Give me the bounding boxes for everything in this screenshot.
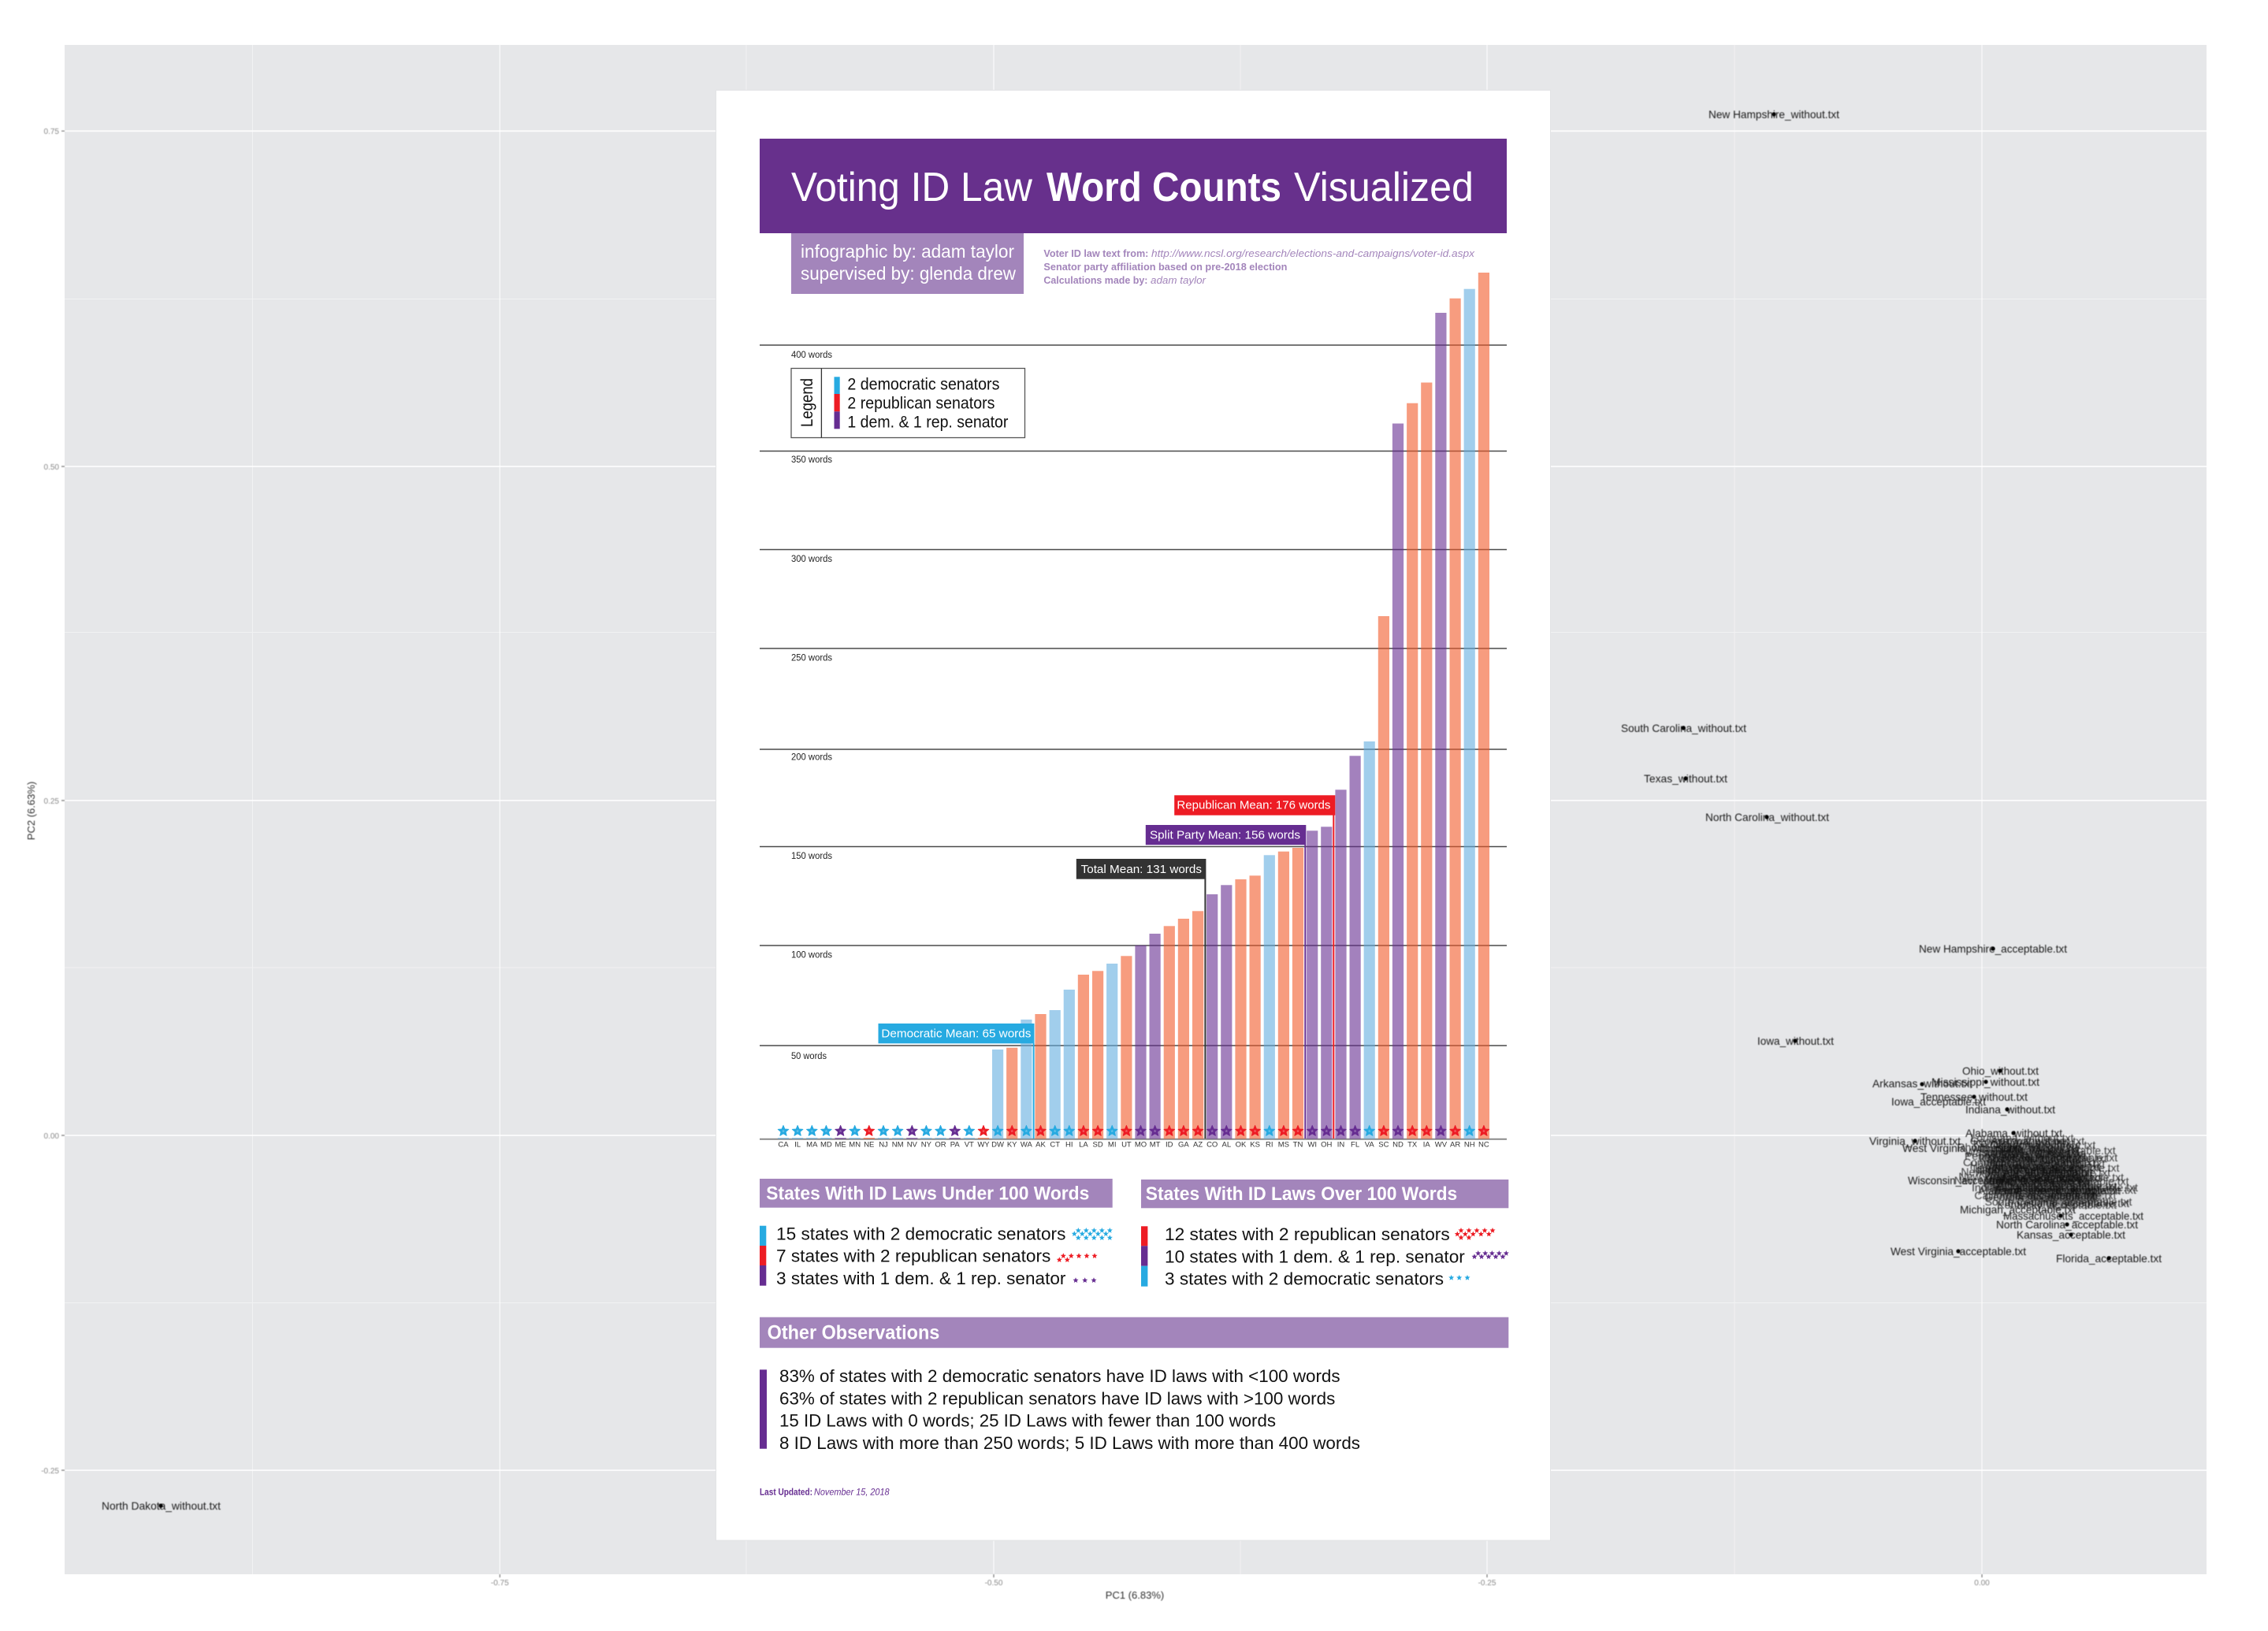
axis ticks and tick labels: 0.00 <box>44 1132 59 1141</box>
title banner: Visualized <box>1294 165 1474 210</box>
scatter labels: dense cluster: Louisiana_without.txt <box>1971 1131 2073 1144</box>
panel: other observations <box>760 1317 1508 1453</box>
gridline value labels <box>791 351 832 1061</box>
heading: over 100 words: States With ID Laws Over 100 Words <box>1146 1183 1457 1205</box>
sources note: Voter ID law text from: <box>1043 247 1148 259</box>
scatter labels: outliers: West Virginia_without.txt <box>1902 1142 2021 1154</box>
state abbreviations axis: AZ <box>1193 1141 1203 1150</box>
scatter labels: dense cluster: Vermont_acceptable.txt <box>1985 1161 2100 1173</box>
state abbreviations axis: ID <box>1166 1141 1173 1150</box>
state abbreviations axis: ND <box>1392 1141 1404 1150</box>
list text: 12 states with 2 republican senators <box>1165 1224 1450 1244</box>
heading: over 100 words <box>1141 1180 1508 1208</box>
scatter labels: outliers: North Dakota_without.txt <box>102 1499 221 1512</box>
axis ticks and tick labels: -0.75 <box>491 1579 509 1588</box>
legend: 2 republican senators <box>847 394 995 413</box>
gridline value labels: 50 words <box>791 1052 827 1061</box>
mean marker: democratic: Democratic Mean: 65 words <box>881 1027 1031 1041</box>
scatter labels: dense cluster: Oklahoma_without.txt <box>1990 1139 2095 1151</box>
party stars under bars <box>778 1125 1489 1135</box>
axis ticks and tick labels: 0.25 <box>44 797 59 806</box>
star pictogram: 3 democratic <box>1448 1275 1470 1280</box>
scatter labels: dense cluster: Kentucky_acceptable.txt <box>1997 1198 2117 1211</box>
list text: 15 states with 2 democratic senators <box>776 1224 1065 1243</box>
scatter labels: dense cluster: Illinois_acceptable.txt <box>1976 1164 2082 1176</box>
scatter labels: dense cluster: Georgia_acceptable.txt <box>1984 1191 2098 1203</box>
state abbreviations axis: PA <box>950 1141 960 1150</box>
scatter labels: outliers: Wisconsin_acceptable.txt <box>1908 1174 2026 1187</box>
state abbreviations axis: VA <box>1365 1141 1374 1150</box>
state abbreviations axis: TN <box>1293 1141 1303 1150</box>
title banner <box>760 139 1507 233</box>
scatter labels: outliers: Ohio_without.txt <box>1962 1064 2039 1077</box>
observation lines: 8 ID Laws with more than 250 words; 5 ID Laws with more than 400 words <box>779 1433 1360 1453</box>
panel: states over 100 words <box>1141 1180 1509 1289</box>
observation lines <box>779 1366 1360 1453</box>
state abbreviations axis: WI <box>1307 1141 1317 1150</box>
axis ticks and tick labels <box>41 128 1990 1588</box>
scatter labels: outliers: Kansas_acceptable.txt <box>2017 1228 2125 1241</box>
state abbreviations axis: AK <box>1035 1141 1046 1150</box>
state abbreviations axis: NC <box>1478 1141 1489 1150</box>
scatter labels: outliers: Virginia_without.txt <box>1869 1135 1961 1147</box>
state abbreviations axis: NM <box>892 1141 904 1150</box>
scatter labels: dense cluster: Washington_without.txt <box>1965 1146 2079 1158</box>
credits box: supervised by: glenda drew <box>801 263 1016 284</box>
state abbreviations axis: GA <box>1178 1141 1189 1150</box>
state abbreviations axis: MI <box>1108 1141 1116 1150</box>
axis ticks and tick labels: -0.25 <box>1478 1579 1497 1588</box>
state abbreviations axis: WV <box>1435 1141 1448 1150</box>
white poster panel <box>716 90 1551 1540</box>
state abbreviations axis: OH <box>1321 1141 1333 1150</box>
scatter labels: outliers: Iowa_acceptable.txt <box>1891 1095 1986 1108</box>
scatter labels: dense cluster: Arizona_without.txt <box>1991 1135 2084 1147</box>
heading: other observations <box>760 1317 1508 1348</box>
legend: 2 democratic senators <box>847 375 999 394</box>
state abbreviations axis: VT <box>965 1141 974 1150</box>
list text <box>776 1224 1065 1288</box>
state abbreviations axis: AR <box>1450 1141 1460 1150</box>
sources note <box>1043 247 1475 286</box>
state abbreviations axis: MO <box>1135 1141 1147 1150</box>
scatter labels: dense cluster: Idaho_acceptable.txt <box>1972 1163 2075 1176</box>
state abbreviations axis: NE <box>864 1141 874 1150</box>
scatter labels: outliers: South Carolina_without.txt <box>1621 722 1746 734</box>
state abbreviations axis: WY <box>977 1141 990 1150</box>
list text: 3 states with 1 dem. & 1 rep. senator <box>776 1269 1065 1288</box>
scatter labels: dense cluster: Missouri_acceptable.txt <box>2002 1151 2117 1164</box>
sources note: http://www.ncsl.org/research/elections-and-campaigns/voter-id.aspx <box>1151 247 1475 259</box>
gridline value labels: 200 words <box>791 753 832 763</box>
state abbreviations axis: AL <box>1221 1141 1231 1150</box>
scatter labels: dense cluster: Connecticut_acceptable.txt <box>1963 1156 2095 1168</box>
state abbreviations axis: MA <box>806 1141 818 1150</box>
heading: under 100 words: States With ID Laws Under 100 Words <box>766 1183 1089 1204</box>
state abbreviations axis: ME <box>835 1141 846 1150</box>
scatter labels: dense cluster: Utah_acceptable.txt <box>1984 1172 2082 1185</box>
state abbreviations axis: FL <box>1351 1141 1359 1150</box>
scatter labels: dense cluster: Alaska_acceptable.txt <box>2003 1166 2110 1179</box>
list text <box>1165 1224 1465 1289</box>
scatter cluster core <box>1978 1144 2106 1206</box>
scatter labels: dense cluster: New York_acceptable.txt <box>1958 1170 2080 1183</box>
observation lines: 83% of states with 2 democratic senators have ID laws with <100 words <box>779 1366 1340 1386</box>
gridline value labels: 400 words <box>791 351 832 360</box>
scatter labels: outliers: Mississippi_without.txt <box>1932 1076 2039 1088</box>
legend: Legend <box>798 378 816 427</box>
scatter labels: dense cluster: Wyoming_acceptable.txt <box>1997 1180 2117 1192</box>
scatter labels: dense cluster: Oregon_acceptable.txt <box>1982 1168 2093 1180</box>
sources note: Senator party affiliation based on pre-2018 election <box>1043 261 1287 273</box>
state abbreviations axis: CT <box>1050 1141 1060 1150</box>
gridline value labels: 100 words <box>791 950 832 960</box>
scatter labels: dense cluster <box>1954 1131 2138 1211</box>
legend: 1 dem. & 1 rep. senator <box>847 413 1008 432</box>
scatter labels: dense cluster: Louisiana_acceptable.txt <box>2008 1197 2129 1209</box>
state abbreviations axis: NH <box>1464 1141 1475 1150</box>
state abbreviations axis: IN <box>1337 1141 1344 1150</box>
title banner: Voting ID Law <box>791 165 1032 210</box>
state abbreviations axis: WA <box>1021 1141 1033 1150</box>
sources note: Calculations made by: <box>1043 274 1147 286</box>
state abbreviations axis: IL <box>794 1141 801 1150</box>
scatter labels: dense cluster: South Carolina_acceptable.txt <box>1985 1195 2132 1208</box>
scatter points: outliers <box>158 112 2111 1508</box>
accent bar <box>760 1369 767 1449</box>
scatter labels: dense cluster: Texas_acceptable.txt <box>2013 1189 2116 1202</box>
scatter labels: dense cluster: Rhode Island_without.txt <box>1957 1141 2078 1154</box>
color key bar <box>1141 1226 1147 1287</box>
scatter labels: dense cluster: Minnesota_acceptable.txt <box>1995 1161 2119 1174</box>
star pictogram: 12 republican <box>1455 1228 1496 1240</box>
scatter labels: dense cluster: Mississippi_acceptable.txt <box>2010 1181 2138 1194</box>
scatter labels: outliers: West Virginia_acceptable.txt <box>1891 1245 2026 1258</box>
state abbreviations axis: IA <box>1423 1141 1430 1150</box>
last updated note: November 15, 2018 <box>814 1486 890 1497</box>
mean marker: republican <box>1174 795 1335 1139</box>
star pictogram: 10 split <box>1471 1250 1509 1259</box>
scatter labels: outliers: Arkansas_without.txt <box>1872 1077 1972 1090</box>
credits box: infographic by: adam taylor <box>801 241 1014 262</box>
scatter labels: dense cluster: Pennsylvania_without.txt <box>1965 1150 2086 1162</box>
scatter labels: outliers: Florida_acceptable.txt <box>2056 1252 2162 1265</box>
scatter labels: outliers: Alabama_without.txt <box>1965 1127 2062 1139</box>
state abbreviations axis: MD <box>820 1141 832 1150</box>
axis title: PC2: PC2 (6.63%) <box>25 782 37 840</box>
state abbreviations axis: SC <box>1378 1141 1389 1150</box>
axis ticks and tick labels: 0.50 <box>44 463 59 472</box>
star pictogram: 3 split <box>1073 1277 1097 1283</box>
scatter labels: outliers: North Carolina_acceptable.txt <box>1996 1218 2138 1231</box>
state abbreviations axis: LA <box>1079 1141 1088 1150</box>
axis title: PC1: PC1 (6.83%) <box>1106 1589 1164 1601</box>
state abbreviations axis: UT <box>1121 1141 1132 1150</box>
scatter labels: dense cluster: Hawaii_without.txt <box>1970 1159 2059 1172</box>
scatter labels: dense cluster: Delaware_acceptable.txt <box>1995 1144 2116 1157</box>
state abbreviations axis: MS <box>1278 1141 1289 1150</box>
observation lines: 15 ID Laws with 0 words; 25 ID Laws with fewer than 100 words <box>779 1411 1276 1431</box>
scatter labels: dense cluster: Ohio_acceptable.txt <box>1992 1176 2090 1189</box>
state abbreviations axis: TX <box>1407 1141 1418 1150</box>
axis ticks and tick labels: -0.50 <box>985 1579 1003 1588</box>
state abbreviations axis: MT <box>1150 1141 1161 1150</box>
scatter labels: outliers: Texas_without.txt <box>1644 772 1727 785</box>
state abbreviations axis: OK <box>1236 1141 1247 1150</box>
gridline value labels: 250 words <box>791 654 832 663</box>
state abbreviations axis: NY <box>921 1141 932 1150</box>
scatter labels: outliers <box>102 108 2162 1512</box>
bar chart: word count by state <box>778 273 1489 1139</box>
gridline value labels: 350 words <box>791 455 832 465</box>
state abbreviations axis: SD <box>1092 1141 1103 1150</box>
scatter labels: dense cluster: Kentucky_without.txt <box>1973 1137 2074 1150</box>
scatter labels: outliers: Indiana_without.txt <box>1965 1103 2055 1116</box>
scatter labels: dense cluster: Maine_acceptable.txt <box>1997 1172 2101 1184</box>
scatter labels: dense cluster: New Mexico_acceptable.txt <box>1954 1174 2088 1187</box>
scatter labels: dense cluster: California_acceptable.txt <box>1974 1189 2095 1202</box>
state abbreviations axis: NJ <box>879 1141 888 1150</box>
scatter labels: dense cluster: Nebraska_acceptable.txt <box>2002 1171 2124 1183</box>
mean marker: split party <box>1146 825 1306 1139</box>
scatter labels: dense cluster: Pennsylvania_acceptable.txt <box>1996 1183 2136 1196</box>
list text: 3 states with 2 democratic senators <box>1165 1269 1444 1289</box>
state abbreviations axis: KY <box>1007 1141 1017 1150</box>
scatter labels: outliers: New Hampshire_acceptable.txt <box>1919 942 2067 955</box>
mean marker: democratic <box>878 1024 1034 1139</box>
scatter labels: dense cluster: Kansas_without.txt <box>1979 1153 2072 1165</box>
scatter labels: outliers: Michigan_acceptable.txt <box>1960 1203 2076 1216</box>
scatter labels: dense cluster: New Jersey_acceptable.txt <box>1961 1165 2093 1178</box>
title banner: Word Counts <box>1047 165 1281 210</box>
state abbreviations axis: HI <box>1065 1141 1073 1150</box>
state abbreviations axis: RI <box>1266 1141 1273 1150</box>
color key bar <box>760 1226 766 1286</box>
last updated note: Last Updated: <box>760 1486 812 1497</box>
state abbreviations axis: MN <box>849 1141 861 1150</box>
last updated note <box>760 1486 890 1497</box>
gridline value labels: 150 words <box>791 852 832 861</box>
heading: other observations: Other Observations <box>768 1322 939 1344</box>
scatter labels: dense cluster: Georgia_without.txt <box>1970 1135 2065 1147</box>
state abbreviations axis: DW <box>991 1141 1004 1150</box>
scatter labels: outliers: Tennessee_without.txt <box>1920 1090 2028 1103</box>
mean marker: split party: Split Party Mean: 156 words <box>1150 829 1300 842</box>
state abbreviations axis: CO <box>1207 1141 1218 1150</box>
scatter labels: dense cluster: Nevada_acceptable.txt <box>1993 1157 2105 1170</box>
state abbreviations axis <box>778 1141 1489 1150</box>
scatter labels: outliers: North Carolina_without.txt <box>1705 811 1829 823</box>
observation lines: 63% of states with 2 republican senators have ID laws with >100 words <box>779 1388 1335 1408</box>
scatter labels: dense cluster: Colorado_without.txt <box>1979 1142 2080 1155</box>
list text: 7 states with 2 republican senators <box>776 1246 1050 1266</box>
mean marker: republican: Republican Mean: 176 words <box>1177 799 1330 812</box>
legend <box>791 369 1024 438</box>
axis ticks and tick labels: 0.75 <box>44 128 59 136</box>
scatter labels: outliers: New Hampshire_without.txt <box>1708 108 1839 121</box>
state abbreviations axis: OR <box>935 1141 946 1150</box>
scatter labels: dense cluster: Indiana_acceptable.txt <box>1972 1181 2082 1194</box>
scatter labels: dense cluster: Maryland_acceptable.txt <box>1987 1152 2107 1165</box>
state abbreviations axis: KS <box>1250 1141 1260 1150</box>
credits box <box>791 233 1024 294</box>
star pictogram: 7 republican <box>1057 1253 1098 1262</box>
mean marker: total: Total Mean: 131 words <box>1081 863 1202 876</box>
state abbreviations axis: CA <box>778 1141 789 1150</box>
sources note: adam taylor <box>1151 274 1207 286</box>
gridline value labels: 300 words <box>791 555 832 564</box>
star pictogram: 15 democratic <box>1072 1228 1113 1240</box>
axis ticks and tick labels: 0.00 <box>1974 1579 1990 1588</box>
scatter labels: outliers: Massachusetts_acceptable.txt <box>2003 1209 2143 1222</box>
scatter labels: dense cluster: Tennessee_acceptable.txt <box>1993 1184 2121 1197</box>
list text: 10 states with 1 dem. & 1 rep. senator <box>1165 1246 1465 1266</box>
axis ticks and tick labels: -0.25 <box>41 1467 59 1476</box>
scatter labels: dense cluster: Montana_without.txt <box>1985 1147 2084 1160</box>
mean marker: total <box>1076 859 1206 1139</box>
scatter labels: dense cluster: Alabama_acceptable.txt <box>1978 1184 2096 1197</box>
scatter labels: dense cluster: South Dakota_acceptable.txt <box>1987 1175 2129 1187</box>
panel: states under 100 words <box>760 1179 1113 1288</box>
state abbreviations axis: NV <box>907 1141 918 1150</box>
chart gridlines <box>760 345 1507 1139</box>
scatter labels: outliers: Iowa_without.txt <box>1757 1035 1834 1047</box>
